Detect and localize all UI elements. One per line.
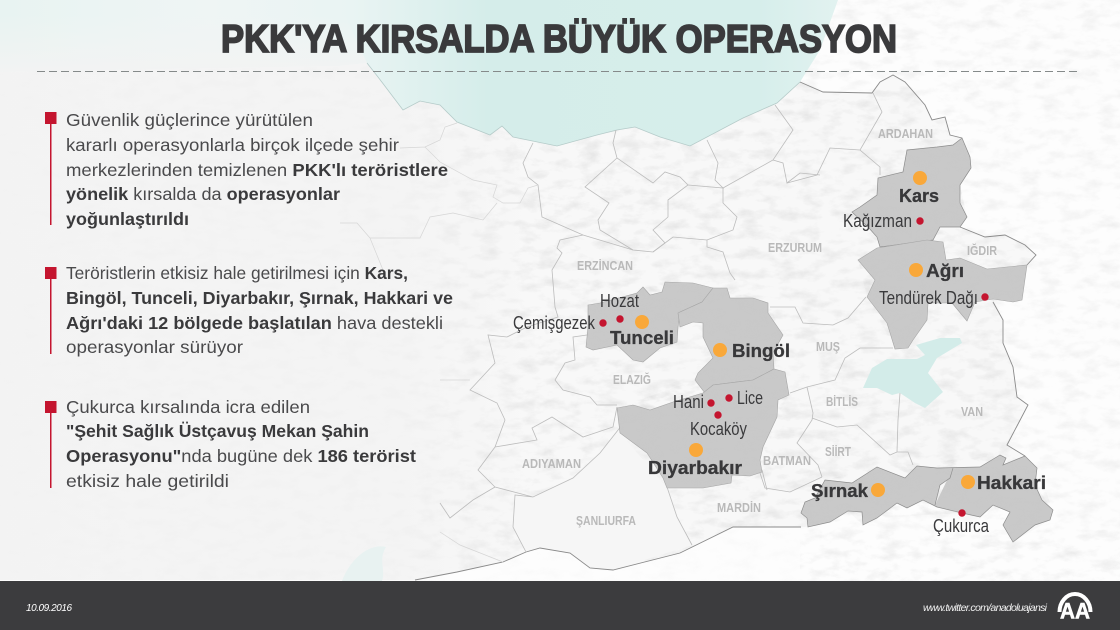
map label group: grey province names: ELAZIĞ (613, 372, 651, 387)
province names bold: Bingöl (732, 340, 790, 361)
text block 1: yönelik kırsalda da operasyonlar (66, 184, 340, 204)
text block 3 (45, 397, 416, 491)
province: Diyarbakır (617, 369, 789, 488)
text block 3: Çukurca kırsalında icra edilen (66, 397, 310, 417)
text block 3: "Şehit Sağlık Üstçavuş Mekan Şahin (66, 421, 369, 441)
district names (513, 210, 990, 536)
terrain on highlighted provinces (644, 174, 995, 512)
provinces: Şırnak and Hakkari (801, 455, 1053, 542)
map label group: grey province names: MUŞ (816, 339, 840, 354)
map label group: grey province names: IĞDIR (967, 243, 997, 258)
map label group: grey province names: ERZİNCAN (577, 258, 633, 273)
province: Bingöl (678, 288, 783, 393)
footer bar (0, 581, 1120, 630)
province markers: orange dots (635, 171, 975, 497)
text block 2: Ağrı'daki 12 bölgede başlatılan hava destekli (66, 313, 443, 333)
province names bold: Tunceli (610, 327, 674, 348)
district names: Hozat (600, 290, 639, 311)
title divider (37, 70, 1081, 72)
district names: Tendürek Dağı (879, 287, 978, 308)
map label group: grey province names: VAN (961, 404, 983, 419)
text block 1: yoğunlaştırıldı (66, 209, 189, 229)
logo: Anadolu Agency: AA (1060, 598, 1090, 624)
district names: Hani (673, 391, 704, 412)
map label group: grey province names: ŞANLIURFA (576, 513, 636, 528)
map: Turkey land base (0, 60, 1036, 580)
map label group: grey province names: ADIYAMAN (522, 456, 581, 471)
text block 1 (45, 110, 448, 229)
title: PKK'YA KIRSALDA BÜYÜK OPERASYON (221, 18, 897, 61)
province: Kars (852, 138, 971, 247)
map label group: grey province names: SİİRT (825, 444, 851, 459)
twitter url: www.twitter.com/anadoluajansi (923, 602, 1048, 614)
province names bold: Diyarbakır (648, 457, 742, 478)
map label group: grey province names: BİTLİS (826, 394, 858, 409)
lake: Atatürk dam (342, 546, 386, 581)
text block 2 (45, 263, 453, 357)
province: Tunceli (586, 282, 713, 362)
district names: Çemişgezek (513, 312, 596, 333)
district names: Lice (737, 387, 763, 408)
map label group: grey province names: ERZURUM (768, 240, 822, 255)
text block 1: merkezlerinden temizlenen PKK'lı teröristlere (66, 160, 448, 180)
date: 10.09.2016 (26, 603, 72, 614)
map label group: grey province names (522, 126, 997, 528)
district names: Çukurca (933, 515, 990, 536)
province names bold: Hakkari (977, 472, 1046, 493)
district names: Kocaköy (690, 418, 748, 439)
province names bold: Şırnak (811, 480, 869, 501)
marker 3 (45, 401, 56, 488)
province: Ağrı (858, 240, 1027, 349)
map label group: grey province names: ARDAHAN (878, 126, 933, 141)
lake Van (863, 338, 962, 408)
text block 2: Bingöl, Tunceli, Diyarbakır, Şırnak, Hakkari ve (66, 288, 453, 308)
text block 3: etkisiz hale getirildi (66, 471, 229, 491)
map label group: grey province names: MARDİN (717, 500, 761, 515)
sea: Black Sea area (0, 0, 838, 146)
district names: Kağızman (843, 210, 912, 231)
map label group: grey province names: BATMAN (763, 453, 811, 468)
province names bold: Ağrı (926, 260, 964, 281)
province names bold: Kars (899, 185, 939, 206)
text block 2: Teröristlerin etkisiz hale getirilmesi için Kars, (66, 263, 408, 283)
text block 2: operasyonlar sürüyor (66, 337, 243, 357)
marker 1 (45, 112, 56, 225)
text block 1: kararlı operasyonlarla birçok ilçede şehir (66, 135, 399, 155)
province names bold (610, 185, 1046, 501)
text block 3: Operasyonu" nda bugüne dek 186 terörist (66, 446, 416, 466)
marker 2 (45, 267, 56, 354)
text block 1: Güvenlik güçlerince yürütülen (66, 110, 313, 130)
district markers: red dots (599, 217, 989, 517)
